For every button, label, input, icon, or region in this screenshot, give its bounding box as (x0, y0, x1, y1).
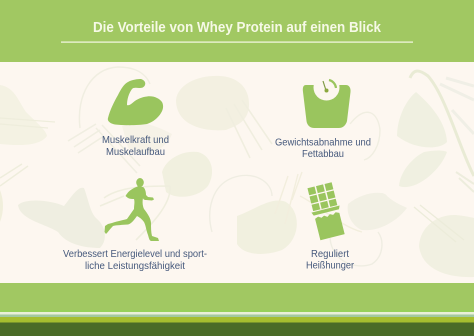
label: energy and performance: liche Leistungsfähigkeit (85, 261, 185, 272)
icon: runner (104, 178, 159, 241)
label: muscle strength: Muskelaufbau (106, 147, 165, 158)
benefit: weight loss (275, 74, 371, 160)
label: weight loss: Fettabbau (302, 149, 344, 160)
title: Die Vorteile von Whey Protein auf einen Blick (93, 20, 382, 36)
icon: bathroom scale (303, 74, 351, 128)
label: energy and performance: Verbessert Energielevel und sport- (63, 249, 207, 260)
benefit: cravings (306, 182, 355, 272)
footer stripes (0, 283, 474, 336)
header band (0, 0, 474, 62)
icon: flexed arm (108, 79, 163, 125)
label: weight loss: Gewichtsabnahme und (275, 138, 371, 148)
label: cravings: Heißhunger (306, 260, 355, 272)
benefit: muscle strength (102, 79, 169, 158)
label: muscle strength: Muskelkraft und (102, 135, 169, 146)
label: cravings: Reguliert (311, 249, 349, 260)
faint food background pattern (0, 67, 474, 277)
icon: chocolate bar (306, 182, 347, 241)
benefit: energy and performance (63, 178, 207, 272)
title underline (61, 42, 413, 43)
